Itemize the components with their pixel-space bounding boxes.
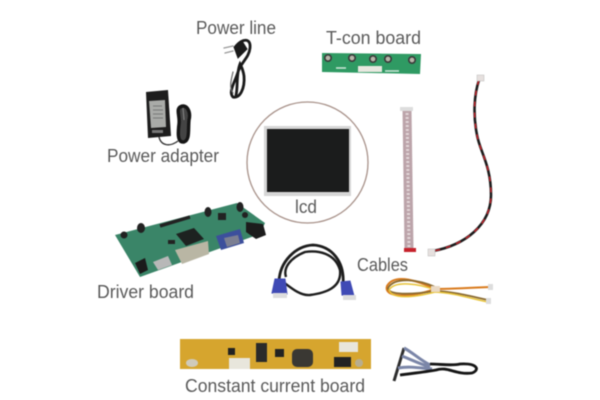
icon: power line cord [224, 40, 250, 97]
ribbon cable [400, 107, 416, 252]
chip [176, 228, 204, 246]
label: T-con board: T-con board [326, 28, 421, 48]
icon: power adapter [146, 90, 190, 145]
label: Power line: Power line [196, 18, 276, 38]
VGA cable [272, 245, 356, 300]
T-con board [322, 53, 421, 74]
driver board [115, 202, 266, 277]
label: Cables: Cables [357, 255, 408, 275]
label: lcd: lcd [295, 197, 317, 217]
multi-colour cable [387, 279, 493, 304]
label: Driver board: Driver board [97, 282, 194, 302]
panel: lcd circle [247, 102, 368, 223]
constant current board [180, 339, 371, 369]
lcd screen [264, 126, 351, 196]
label: Power adapter: Power adapter [107, 146, 219, 166]
twisted red and black cable [428, 75, 491, 256]
LVDS cable [394, 348, 476, 381]
label: Constant current board: Constant current board [185, 376, 365, 396]
